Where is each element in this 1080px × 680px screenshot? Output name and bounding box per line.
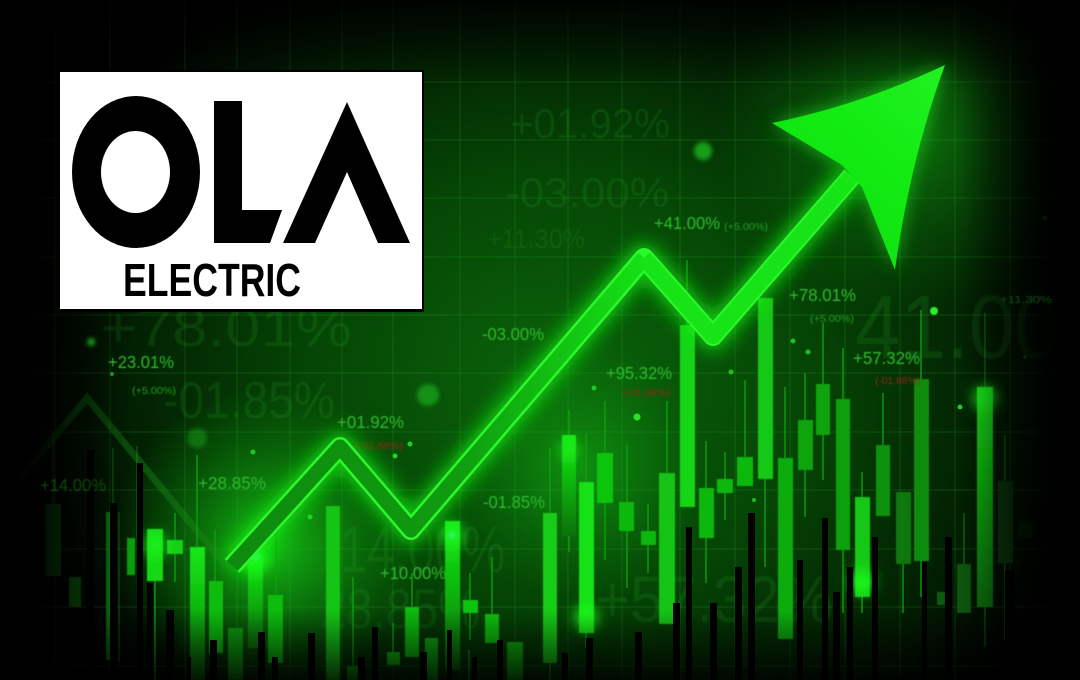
OLA Electric logo panel [58, 70, 424, 312]
candlestick bodies [45, 298, 1033, 680]
faint background percentage figures: 41.00 [855, 278, 1060, 378]
faint background percentage figures: -03.00% [505, 169, 669, 216]
rising arrow [232, 65, 945, 566]
small percentage labels: +28.85% [198, 473, 266, 493]
small secondary labels [132, 221, 1052, 397]
red labels: (-01.88%) [875, 375, 920, 387]
small percentage labels: +57.32% [853, 348, 920, 368]
glow dots [87, 142, 1048, 520]
small percentage labels: -03.00% [482, 324, 544, 344]
faint background percentage figures: -01.85% [163, 372, 335, 430]
small percentage labels: +10.00% [380, 563, 446, 583]
logo letter O [72, 96, 200, 248]
small secondary labels: +11.30% [1000, 294, 1052, 306]
small percentage labels: +41.00% [654, 213, 720, 233]
faint background percentage figures: +01.92% [510, 100, 670, 147]
small percentage labels: +01.92% [337, 412, 404, 432]
faint background percentage figures: +78.01% [100, 298, 352, 358]
faint background percentage figures: +57.32% [595, 562, 833, 636]
faint background percentage figures: 28.85% [320, 577, 480, 640]
small percentage labels [40, 213, 920, 583]
red labels: (-01.88%) [623, 387, 670, 399]
small percentage labels: -01.85% [483, 492, 545, 512]
small percentage labels: +23.01% [108, 352, 174, 372]
ELECTRIC wordmark: ELECTRIC [123, 254, 301, 306]
small percentage labels: +95.32% [606, 363, 672, 383]
faint background percentage figures: +11.30% [487, 224, 585, 254]
red labels [355, 375, 920, 452]
candle highlight glows [143, 387, 996, 629]
faint background percentage figures [100, 100, 1060, 640]
small percentage labels: +78.01% [789, 285, 856, 305]
foreground black silhouette bars [87, 450, 1015, 680]
small secondary labels: (+5.00%) [132, 385, 176, 397]
small percentage labels: +14.00% [40, 475, 106, 495]
logo letter L [214, 101, 282, 243]
faint background percentage figures: 14.00% [340, 512, 505, 586]
small secondary labels: (+5.00%) [724, 221, 768, 233]
small secondary labels: (+5.00%) [810, 313, 854, 325]
red labels: (-01.88%) [355, 440, 403, 452]
logo letter A [283, 102, 410, 243]
faint left chart line [20, 398, 232, 573]
candlestick wicks [53, 260, 1005, 680]
